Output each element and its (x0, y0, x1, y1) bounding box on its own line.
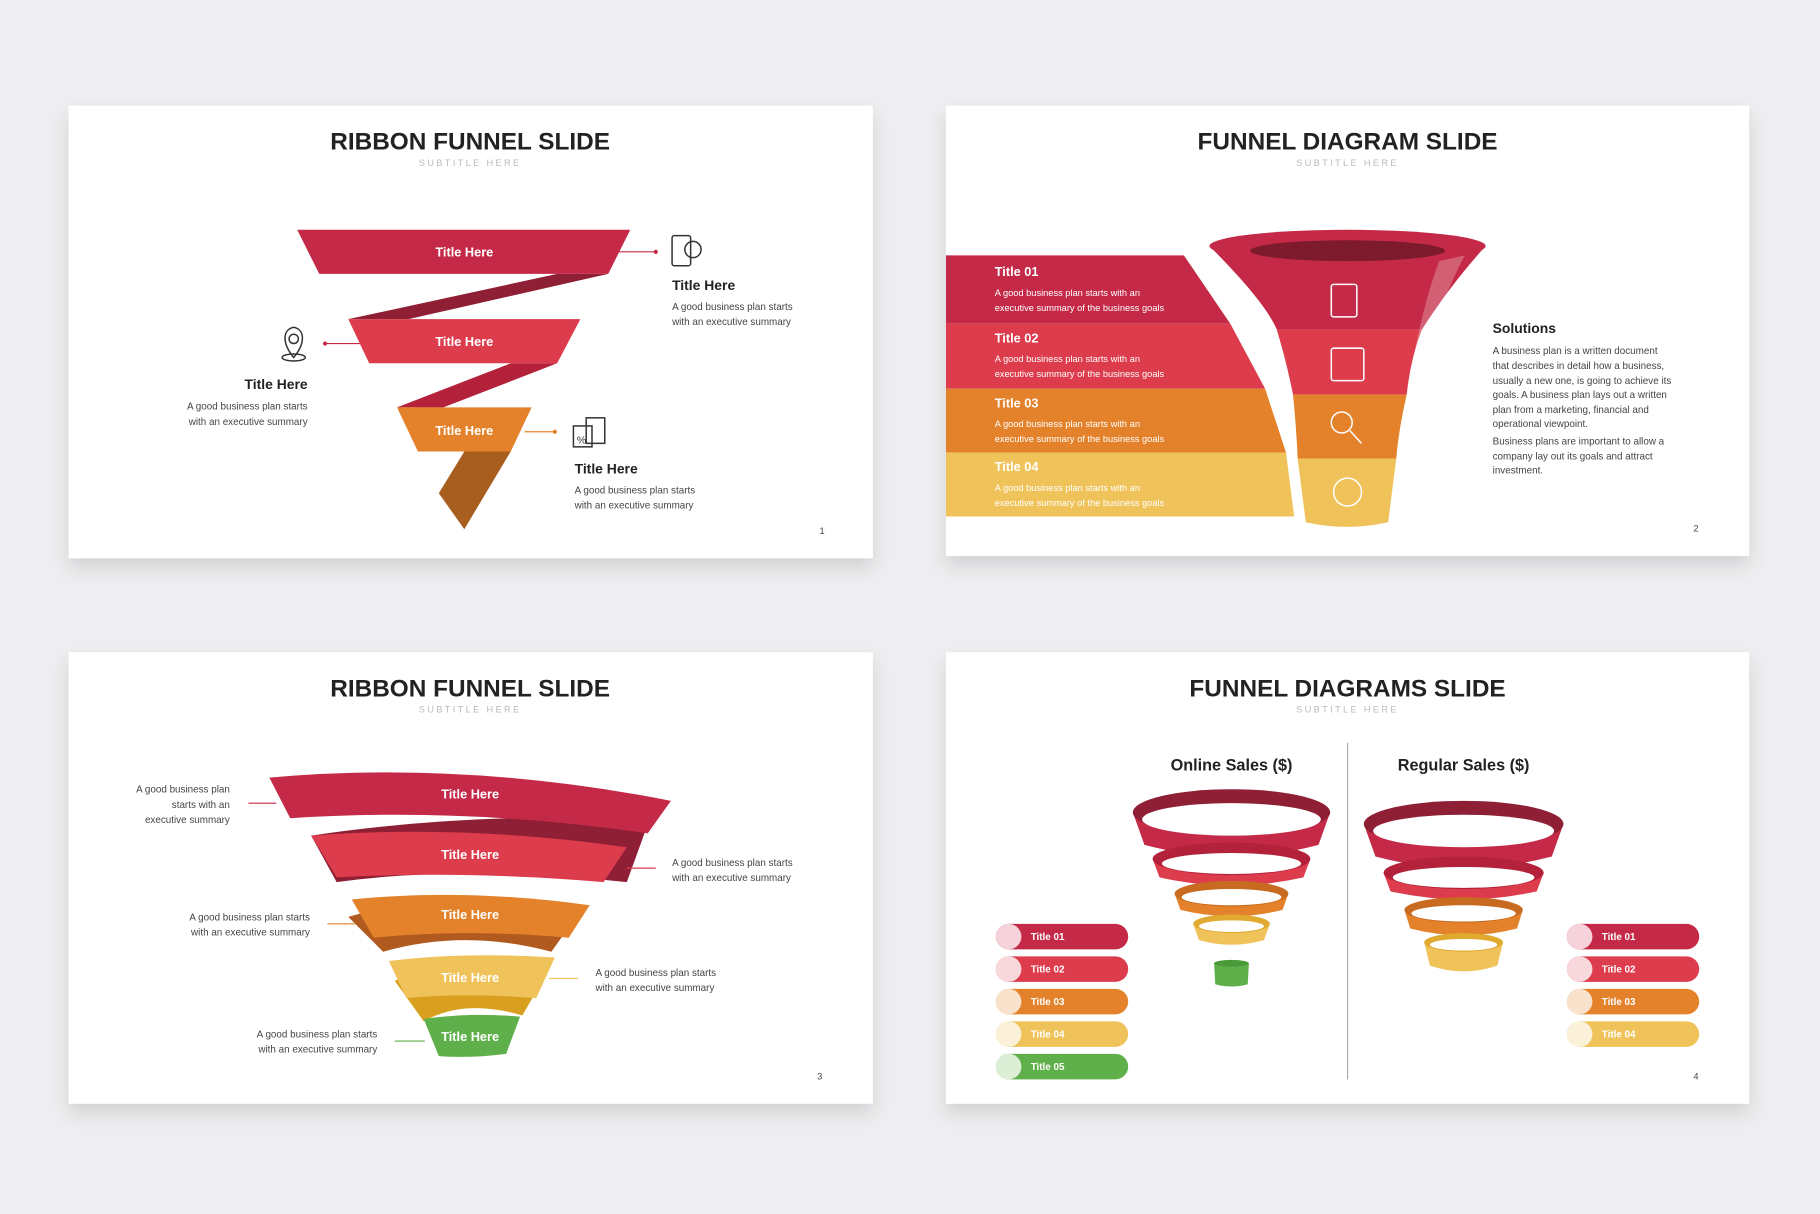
curved ribbon funnel: Title Here (441, 970, 499, 985)
funnel ribbon: Title Here (435, 334, 493, 349)
legend right: Title 04 (1602, 1030, 1636, 1041)
text block right top (671, 277, 793, 328)
text block: solutions (1493, 320, 1671, 477)
text block right top: Title Here (672, 277, 735, 293)
callouts: A good business plan starts (189, 912, 310, 923)
title: RIBBON FUNNEL SLIDE (330, 675, 610, 702)
callouts: starts with an (172, 800, 230, 811)
slide 2: funnel diagram: 2 (1693, 524, 1699, 534)
callouts: A good business plan starts (672, 858, 793, 869)
text block: solutions: Business plans are important to allow a (1493, 437, 1665, 448)
curved ribbon funnel: Title Here (441, 787, 499, 802)
text block: solutions: company lay out its goals and attract (1493, 452, 1653, 463)
curved ribbon funnel: Title Here (441, 907, 499, 922)
callouts: executive summary (145, 815, 230, 826)
slide 3: ribbon funnel curved: SUBTITLE HERE (419, 705, 522, 715)
bands: executive summary of the business goals (995, 498, 1165, 508)
curved ribbon funnel: Title Here (441, 1029, 499, 1044)
text block left: A good business plan starts (187, 402, 308, 413)
text block right bottom: with an executive summary (574, 500, 694, 511)
text block right bottom: A good business plan starts (575, 485, 695, 496)
online sales funnel: Online Sales ($) (1171, 757, 1292, 775)
text block left: Title Here (245, 376, 308, 392)
funnel (1209, 230, 1486, 527)
text block right bottom: Title Here (575, 461, 638, 477)
text block: solutions: investment. (1493, 466, 1543, 477)
title: FUNNEL DIAGRAMS SLIDE (1189, 675, 1506, 702)
bands: Title 02 (995, 330, 1038, 345)
callouts (136, 785, 793, 1056)
slide 3: ribbon funnel curved (69, 652, 873, 1104)
slide 4: funnel diagrams (946, 652, 1749, 1104)
funnel ribbon: Title Here (435, 423, 493, 438)
callouts: with an executive summary (257, 1045, 377, 1056)
text block: solutions: plan from a marketing, financial and (1493, 405, 1649, 416)
slide 4: funnel diagrams: 4 (1693, 1071, 1699, 1081)
text block: solutions: operational viewpoint. (1493, 419, 1588, 430)
text block: solutions: A business plan is a written document (1493, 346, 1658, 357)
callouts: with an executive summary (594, 983, 714, 994)
title: FUNNEL DIAGRAM SLIDE (1198, 129, 1498, 156)
bands: A good business plan starts with an (995, 419, 1140, 429)
slide 1: ribbon funnel: 1 (819, 526, 825, 536)
bands (946, 255, 1294, 516)
slide 2: funnel diagram (946, 106, 1749, 556)
callouts: A good business plan starts (257, 1030, 377, 1041)
bands: executive summary of the business goals (995, 303, 1165, 313)
callouts: A good business plan (136, 785, 230, 796)
slide 4: funnel diagrams: SUBTITLE HERE (1296, 705, 1399, 715)
callouts: A good business plan starts (595, 968, 716, 979)
bands: Title 01 (995, 264, 1038, 279)
regular sales funnel: Regular Sales ($) (1398, 757, 1529, 775)
slide 1: ribbon funnel (69, 106, 873, 558)
legend right: Title 03 (1602, 997, 1636, 1008)
text block right bottom (574, 461, 695, 511)
title: RIBBON FUNNEL SLIDE (330, 129, 610, 156)
bands: Title 03 (995, 395, 1038, 410)
icon: shopping bags (573, 418, 605, 447)
slide 1: ribbon funnel: SUBTITLE HERE (419, 158, 522, 168)
legend left: Title 01 (1031, 932, 1065, 943)
regular sales funnel (1364, 757, 1563, 971)
text block: solutions: that describes in detail how a business, (1493, 361, 1664, 372)
legend left: Title 05 (1031, 1062, 1065, 1073)
icon: shopping bags: % (577, 435, 586, 446)
bands: executive summary of the business goals (995, 434, 1165, 444)
callouts: with an executive summary (190, 927, 310, 938)
curved ribbon funnel: Title Here (441, 847, 499, 862)
text block: solutions: Solutions (1493, 320, 1556, 336)
curved ribbon funnel (269, 772, 671, 1057)
bands: A good business plan starts with an (995, 354, 1140, 364)
icon: phone (672, 236, 701, 266)
funnel ribbon: Title Here (435, 244, 493, 259)
bands: executive summary of the business goals (995, 369, 1165, 379)
legend left: Title 04 (1031, 1030, 1065, 1041)
legend left (996, 924, 1128, 1079)
slide 2: funnel diagram: SUBTITLE HERE (1296, 158, 1399, 168)
text block left: with an executive summary (188, 417, 308, 428)
bands: A good business plan starts with an (995, 483, 1140, 493)
text block: solutions: goals. A business plan lays out a written (1493, 390, 1667, 401)
funnel ribbon (297, 230, 630, 529)
bands: Title 04 (995, 459, 1039, 474)
text block right top: with an executive summary (671, 317, 791, 328)
text block: solutions: usually a new one, is going to achieve its (1493, 376, 1671, 387)
slide 3: ribbon funnel curved: 3 (817, 1071, 822, 1081)
bands: A good business plan starts with an (995, 288, 1140, 298)
legend right: Title 01 (1602, 932, 1636, 943)
icon: location pin (282, 327, 305, 361)
legend left: Title 03 (1031, 997, 1065, 1008)
callouts: with an executive summary (671, 873, 791, 884)
text block right top: A good business plan starts (672, 302, 793, 313)
legend right (1567, 924, 1699, 1047)
legend left: Title 02 (1031, 965, 1065, 976)
legend right: Title 02 (1602, 965, 1636, 976)
online sales funnel (1133, 757, 1330, 987)
text block left (187, 376, 308, 428)
